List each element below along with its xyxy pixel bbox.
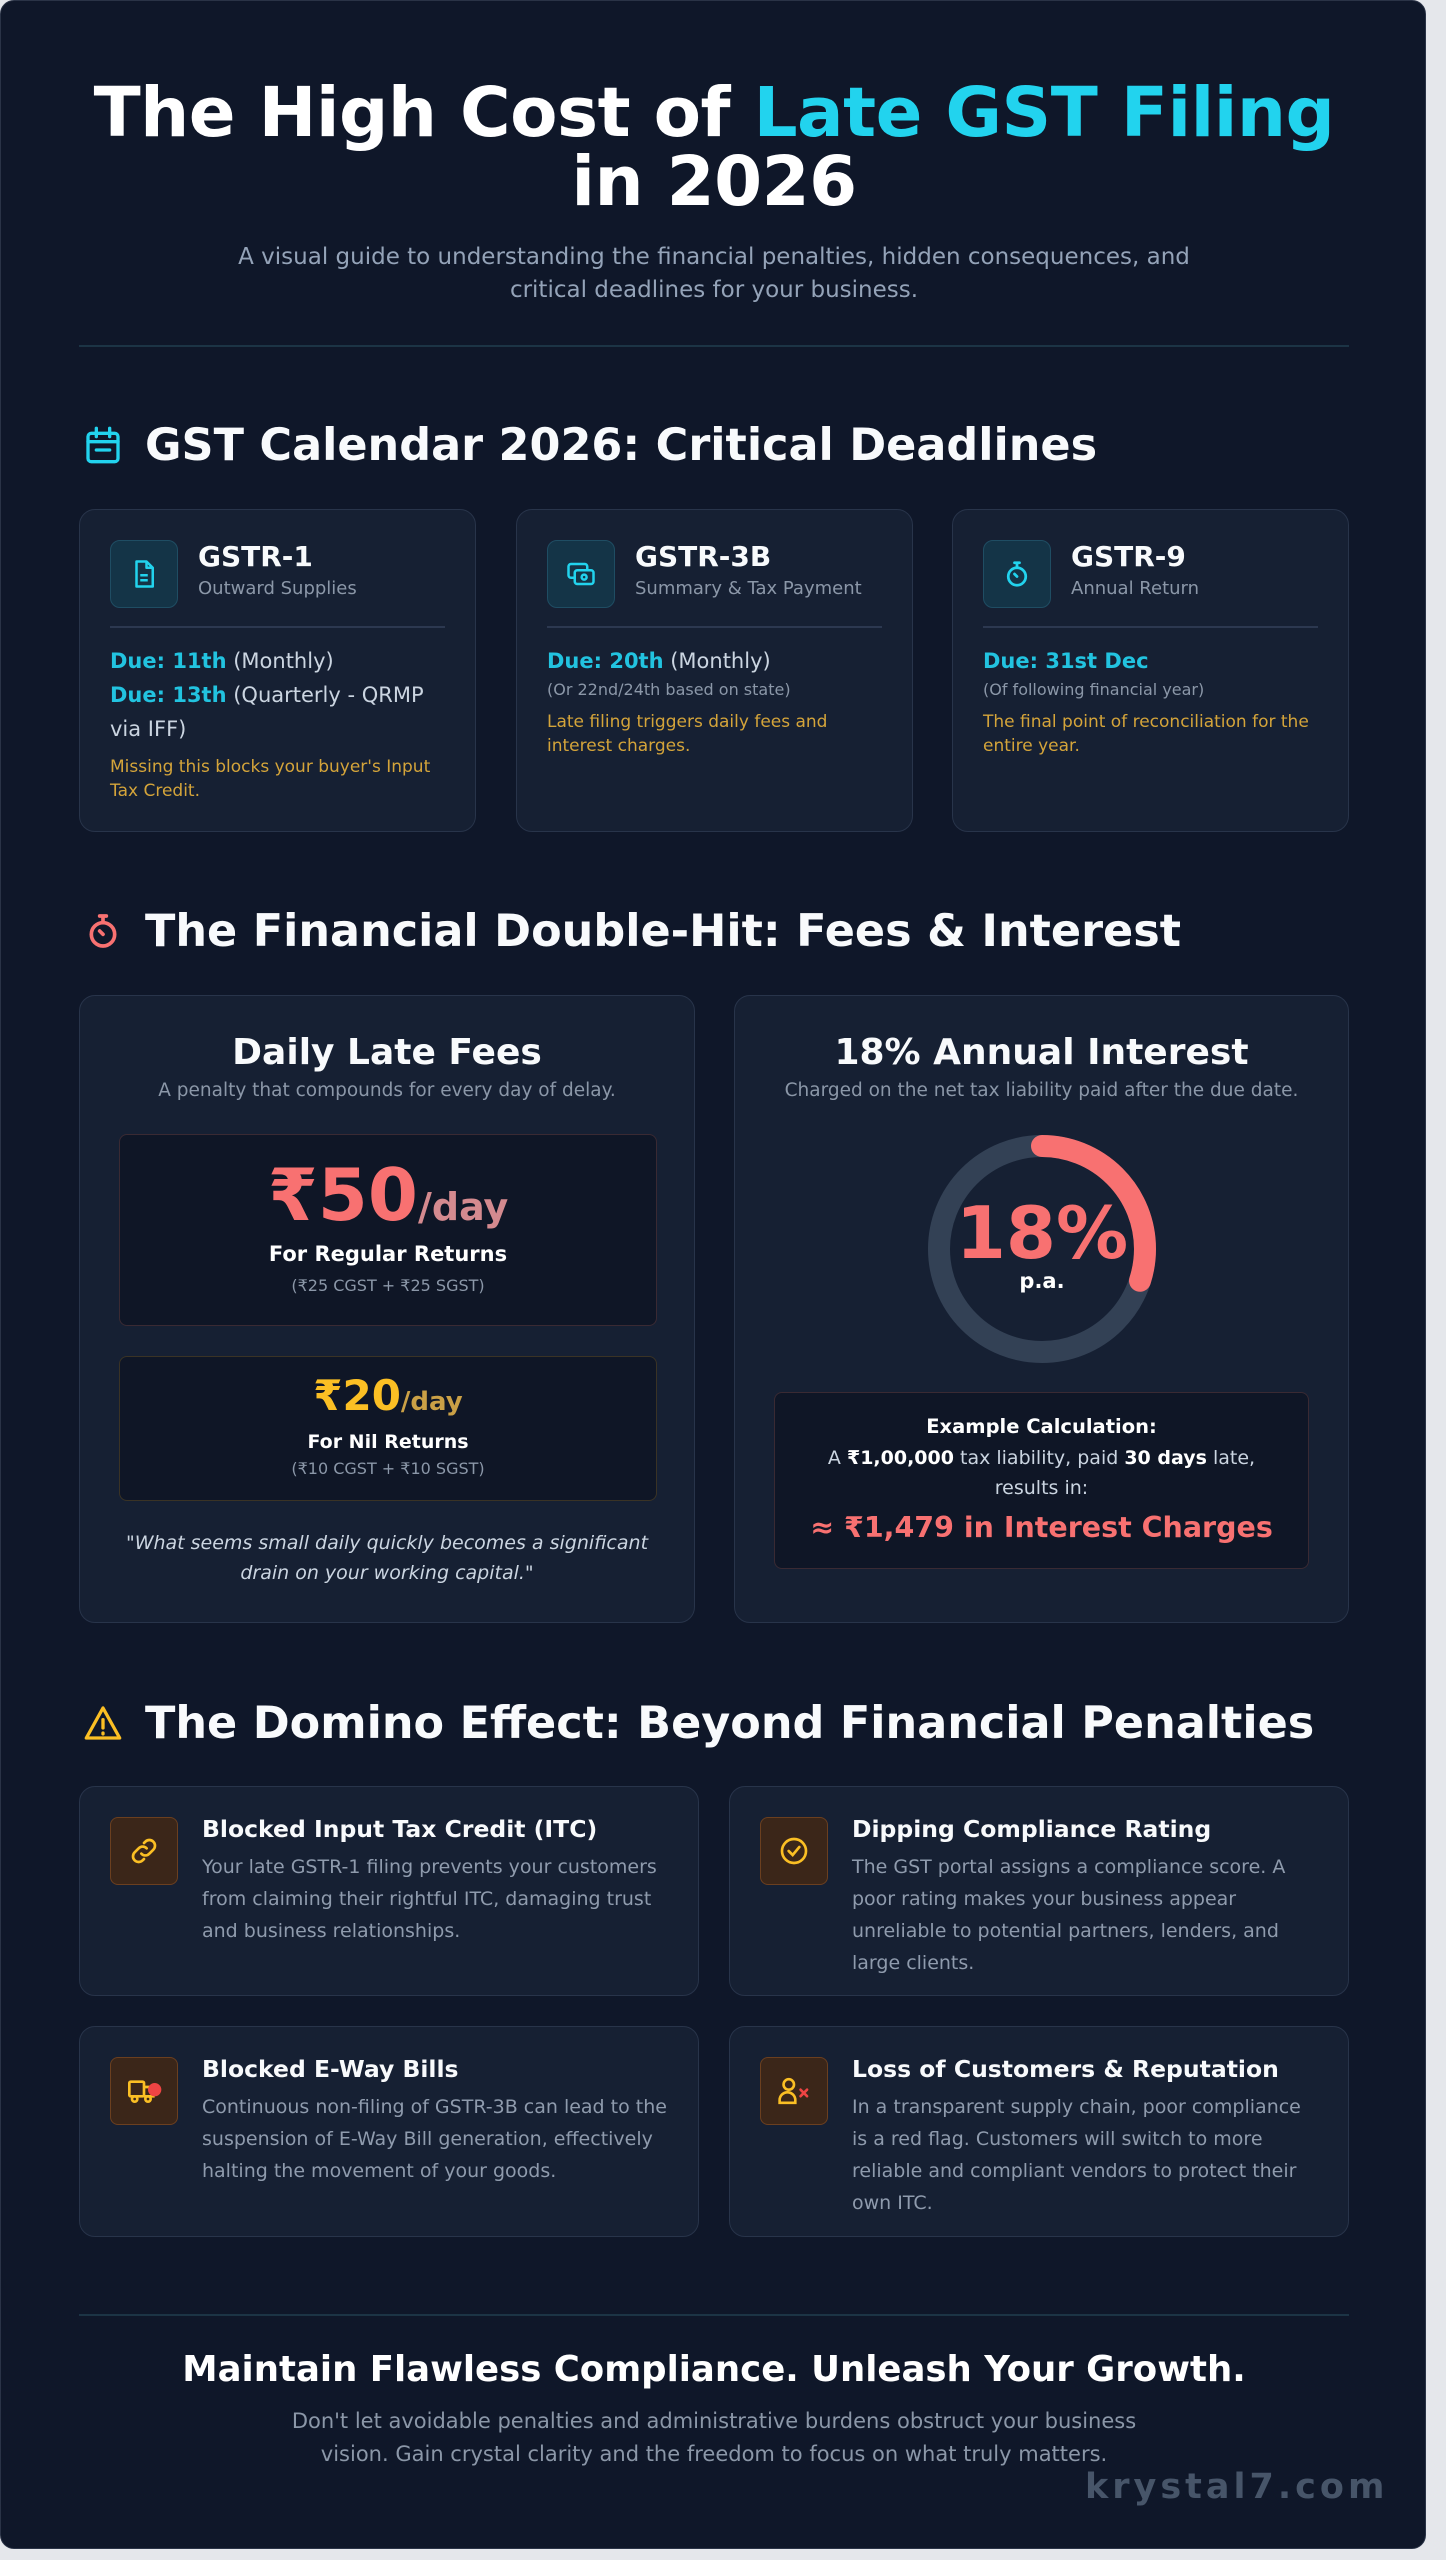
footer text: Don't let avoidable penalties and administrative burdens obstruct your business vision. Gain crystal clarity and the freedom to focus on what truly matters. [292, 2409, 1136, 2466]
box: regular returns: (₹25 CGST + ₹25 SGST) [291, 1276, 485, 1295]
box: regular returns: For Regular Returns [269, 1242, 507, 1266]
due dates: Due: 13th (Quarterly - QRMP via IFF) [110, 683, 424, 741]
chart: ring: p.a. [1019, 1269, 1065, 1293]
box: nil returns: ₹20/day [313, 1371, 463, 1420]
icon: link [110, 1817, 178, 1885]
panel: 18% interest: Charged on the net tax liability paid after the due date. [785, 1080, 1298, 1101]
example calculation: A ₹1,00,000 tax liability, paid 30 days late, results in: [828, 1447, 1255, 1499]
card: GSTR-3B: GSTR-3B [635, 540, 771, 573]
title: The High Cost of Late GST Filing [94, 73, 1334, 153]
panel: daily late fees: Daily Late Fees [232, 1032, 542, 1073]
icon: document [110, 540, 178, 608]
note: Missing this blocks your buyer's Input Tax Credit. [110, 757, 430, 801]
box: regular returns: ₹50/day [268, 1153, 508, 1237]
panel: daily late fees [79, 995, 695, 1623]
quote: "What seems small daily quickly becomes a significant drain on your working capital." [126, 1532, 648, 1584]
title: in 2026 [571, 142, 857, 222]
subtitle: A visual guide to understanding the financial penalties, hidden consequences, and critical deadlines for your business. [238, 244, 1190, 303]
due date: Due: 20th (Monthly) [547, 649, 771, 673]
card: e-way bills [79, 2026, 699, 2237]
card: blocked ITC [79, 1786, 699, 1996]
icon: money [547, 540, 615, 608]
heading: financial double-hit: The Financial Double-Hit: Fees & Interest [145, 906, 1181, 956]
chart: ring [928, 1135, 1156, 1363]
heading: GST calendar: GST Calendar 2026: Critical Deadlines [145, 420, 1097, 470]
icon: check circle [760, 1817, 828, 1885]
due dates: Due: 11th (Monthly) [110, 649, 334, 673]
heading: domino effect: The Domino Effect: Beyond Financial Penalties [145, 1698, 1314, 1748]
card: compliance rating [729, 1786, 1349, 1996]
card: e-way bills: Blocked E-Way Bills [202, 2055, 459, 2083]
chart: ring: 18% [956, 1191, 1128, 1275]
example calculation: ≈ ₹1,479 in Interest Charges [810, 1511, 1273, 1544]
card: GSTR-1: Outward Supplies [198, 578, 357, 599]
card: blocked ITC: Your late GSTR-1 filing prevents your customers from claiming their rightful ITC, damaging trust and business relationships. [202, 1856, 657, 1942]
footer heading: Maintain Flawless Compliance. Unleash Your Growth. [182, 2349, 1246, 2390]
card: e-way bills: Continuous non-filing of GSTR-3B can lead to the suspension of E-Way Bill generation, effectively halting the movement of your goods. [202, 2096, 667, 2182]
panel: daily late fees: A penalty that compounds for every day of delay. [158, 1080, 616, 1101]
box: nil returns: For Nil Returns [307, 1431, 469, 1453]
card: compliance rating: The GST portal assigns a compliance score. A poor rating makes your business appear unreliable to potential partners, lenders, and large clients. [852, 1856, 1285, 1974]
panel: 18% interest [734, 995, 1349, 1623]
card: GSTR-3B: (Or 22nd/24th based on state) [547, 680, 791, 699]
icon: user x [760, 2057, 828, 2125]
card: GSTR-9: (Of following financial year) [983, 680, 1204, 699]
card: GSTR-9 [952, 509, 1349, 832]
note: Late filing triggers daily fees and interest charges. [547, 712, 827, 756]
card: compliance rating: Dipping Compliance Rating [852, 1815, 1211, 1843]
card: loss of customers [729, 2026, 1349, 2237]
card: GSTR-9: Annual Return [1071, 578, 1199, 599]
due dates [110, 649, 424, 741]
icon: stopwatch [983, 540, 1051, 608]
watermark: krystal7.com [1085, 2467, 1388, 2507]
card: GSTR-3B [516, 509, 913, 832]
icon: truck [110, 2057, 178, 2125]
box: regular returns [119, 1134, 657, 1326]
card: GSTR-3B: Summary & Tax Payment [635, 578, 862, 599]
card: GSTR-1: GSTR-1 [198, 540, 313, 573]
note: The final point of reconciliation for the entire year. [983, 712, 1309, 756]
box: nil returns: (₹10 CGST + ₹10 SGST) [291, 1459, 485, 1478]
card: GSTR-9: GSTR-9 [1071, 540, 1186, 573]
example calculation: Example Calculation: [926, 1415, 1157, 1438]
card: blocked ITC: Blocked Input Tax Credit (ITC) [202, 1815, 597, 1843]
icon: calendar [86, 426, 120, 464]
icon: warning [84, 1706, 122, 1740]
panel: 18% interest: 18% Annual Interest [834, 1032, 1249, 1073]
due date: Due: 31st Dec [983, 649, 1149, 673]
card: loss of customers: Loss of Customers & Reputation [852, 2055, 1279, 2083]
card: loss of customers: In a transparent supply chain, poor compliance is a red flag. Customers will switch to more reliable and compliant vendors to protect their own ITC. [852, 2096, 1301, 2214]
example calculation [774, 1392, 1309, 1569]
card: GSTR-1 [79, 509, 476, 832]
icon: stopwatch red [90, 914, 116, 948]
title [94, 73, 1334, 222]
box: nil returns [119, 1356, 657, 1501]
